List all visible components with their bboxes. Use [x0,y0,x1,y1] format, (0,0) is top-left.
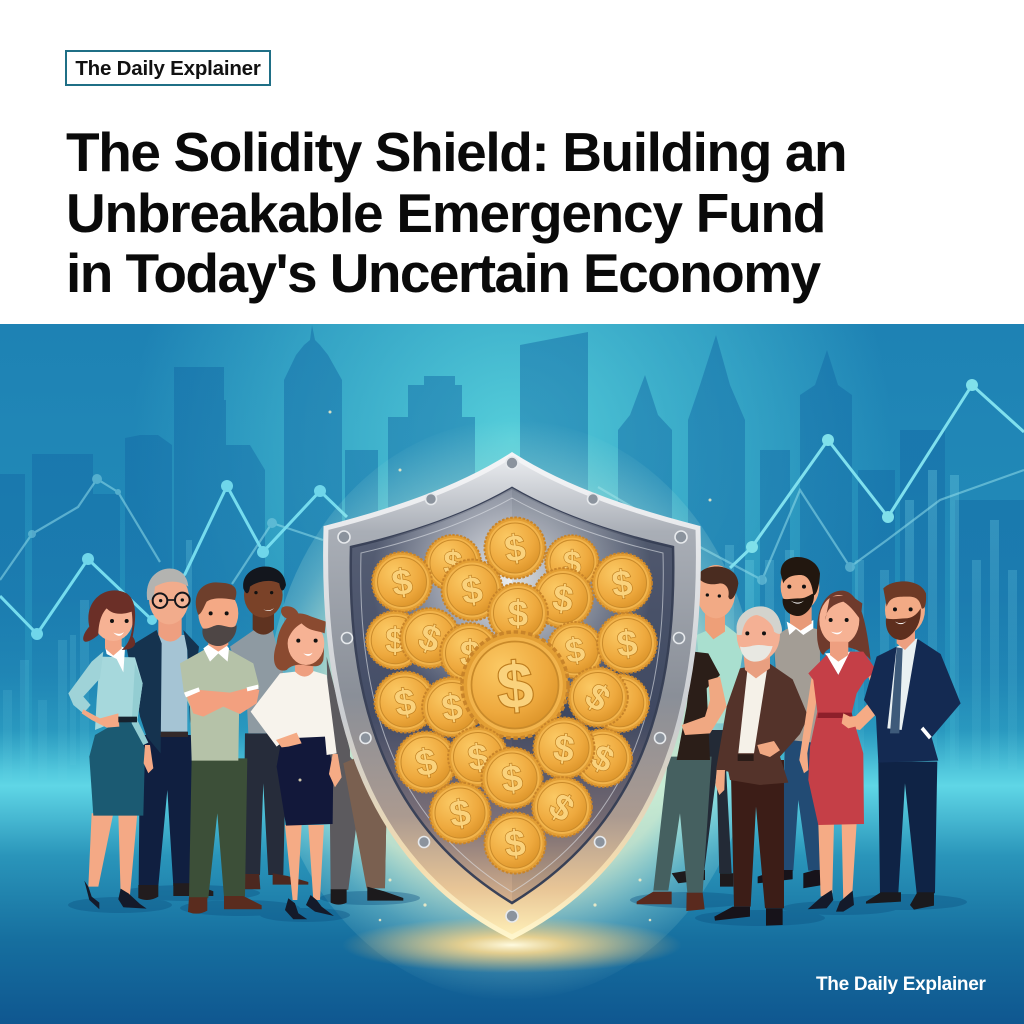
people left group [68,566,403,919]
title: Unbreakable Emergency Fund [66,182,825,244]
person: older man glasses [127,568,213,900]
skyline [0,325,1024,770]
coin pile: $ [439,686,465,729]
title: in Today's Uncertain Economy [66,242,820,304]
title: The Solidity Shield: Building an [66,121,846,183]
floor glow [342,917,682,973]
person: woman far left [68,590,153,909]
coin pile: $ [542,785,582,830]
person: elderly man brown suit [714,606,808,926]
coin pile: $ [495,648,535,723]
coin pile: $ [413,616,446,661]
rivets [338,457,687,922]
floor shadows [68,885,967,926]
coin pile: $ [465,736,491,779]
brand tag [65,50,271,86]
coin pile: $ [586,737,620,781]
coin pile: $ [412,740,441,785]
coin pile: $ [385,621,405,660]
coin pile: $ [391,680,419,724]
footer brand: The Daily Explainer [816,974,986,995]
bar chart backdrop [3,470,1017,780]
person: woman white top [251,606,342,919]
coin pile: $ [578,675,618,720]
coin pile: $ [447,792,474,835]
coin pile: $ [500,757,525,800]
line chart left [0,480,347,640]
coin pile: $ [503,822,528,865]
line chart right [730,379,1024,568]
coin pile: $ [444,545,463,583]
coin pile: $ [502,527,529,570]
coin pile [366,518,657,874]
coin pile: $ [460,633,480,674]
coin pile: $ [389,561,415,604]
illustration [0,324,1024,1024]
person: bearded man back [758,557,823,888]
coin pile: $ [615,622,639,665]
person: man navy suit [864,581,961,910]
panel: scene background [0,324,1024,1024]
shield [326,440,698,937]
person: woman red dress [799,591,891,912]
coin pile: $ [508,593,528,634]
coin pile: $ [551,727,577,770]
coin pile: $ [459,569,486,612]
person: dark man [230,566,308,889]
person: man behind shield left [327,657,403,905]
person: man in teal shirt [637,565,745,911]
faint line chart [0,470,1024,585]
coin pile: $ [563,544,581,580]
shield halo [267,420,757,1000]
coin pile: $ [550,577,576,620]
person: man crossed arms [180,582,262,914]
title [66,121,846,304]
coin pile: $ [563,631,588,671]
brand tag: The Daily Explainer [75,57,261,80]
sparkles [298,410,712,921]
people right group [637,557,961,926]
coin pile: $ [610,562,634,605]
